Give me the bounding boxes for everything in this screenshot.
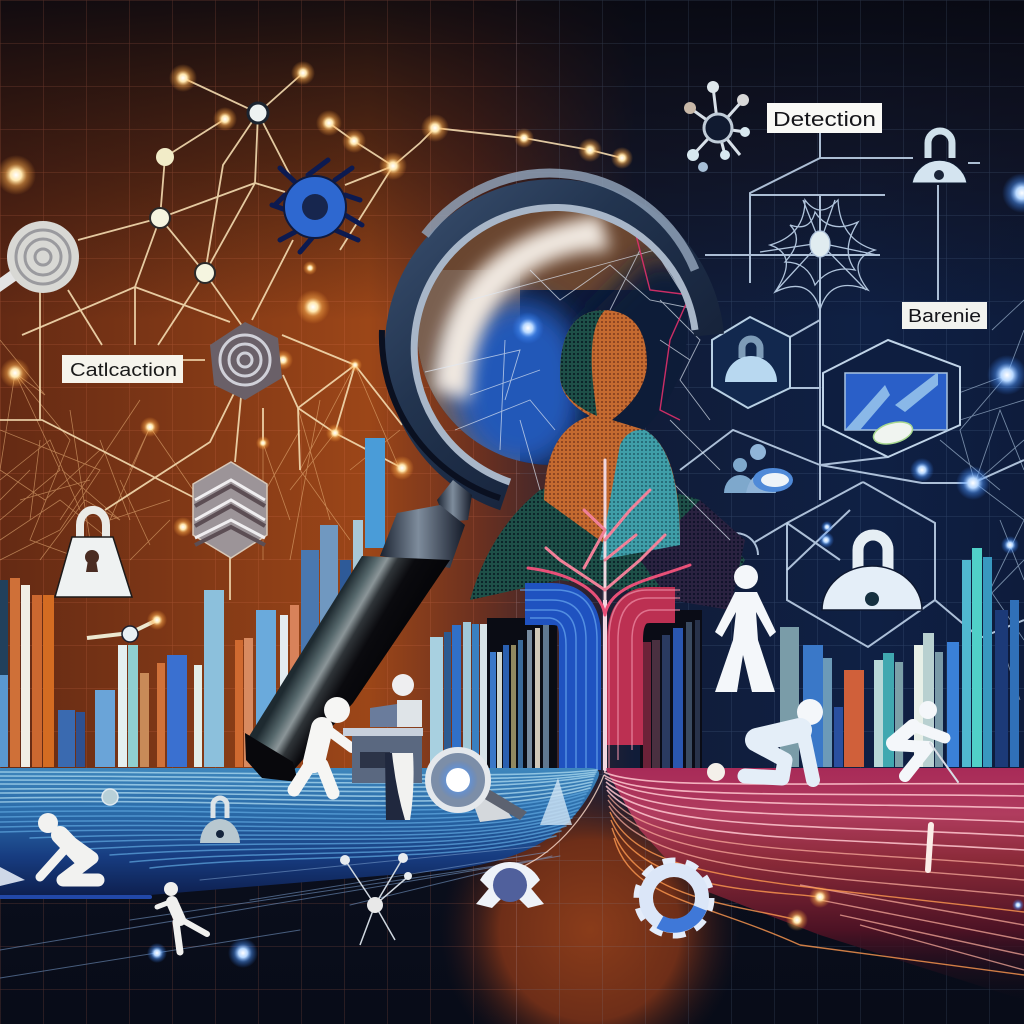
- icon: spider web: [760, 200, 877, 310]
- icon: spark lens: [428, 750, 527, 822]
- label: Barenie: Barenie: [908, 306, 981, 326]
- person: crouching right: [893, 701, 958, 782]
- person: kneeling: [745, 699, 823, 780]
- glint: [928, 825, 931, 870]
- fine mesh right: [940, 300, 1024, 700]
- red floor: [605, 768, 1024, 1000]
- person: kneeling left: [38, 813, 98, 880]
- sparkles right: [818, 173, 1024, 554]
- network: left constellation: [0, 73, 622, 600]
- network nodes left: [0, 61, 633, 537]
- label: Detection: Detection: [773, 109, 876, 131]
- board: [0, 867, 25, 886]
- icon: hexagon lock: [712, 317, 790, 408]
- floor streams: [0, 768, 1024, 1000]
- person: running: [157, 882, 207, 952]
- label: Catlcaction: [62, 355, 183, 383]
- data cloud behind person: [470, 470, 745, 610]
- curved data streams: [520, 590, 680, 770]
- icon: fingerprint disc: [210, 322, 282, 400]
- icon: molecule: [684, 81, 750, 172]
- handle cap: [245, 733, 298, 782]
- icon: gear: [639, 863, 709, 933]
- bottom sparkles: [147, 886, 1024, 968]
- circle marker: [707, 763, 725, 781]
- person: desk: [343, 674, 423, 783]
- people icons: [0, 565, 958, 952]
- silhouette person: [544, 310, 680, 560]
- icon: people group: [724, 444, 793, 493]
- icon: node on stick: [87, 610, 167, 642]
- icon: cog ring: [476, 862, 544, 908]
- pale node: [102, 789, 118, 805]
- ring: [382, 173, 709, 498]
- bar chart right: [780, 548, 1019, 767]
- bar chart left: [0, 438, 385, 767]
- magnifying glass: [245, 173, 730, 782]
- red floor lines: [520, 772, 1024, 975]
- lens: [418, 211, 686, 465]
- label: Catlcaction: Catlcaction: [70, 360, 177, 380]
- icon: wedge: [385, 753, 414, 820]
- bottom node: [340, 853, 412, 945]
- blue floor: [0, 768, 599, 895]
- tree: [528, 460, 690, 770]
- icon: virus: [272, 160, 362, 252]
- person: standing: [715, 565, 776, 692]
- icon: padlock top right: [912, 131, 967, 183]
- blue floor lines: [0, 770, 597, 978]
- label: Barenie: [902, 302, 987, 329]
- fine mesh left: [0, 340, 400, 560]
- bar chart centre and corridors: [430, 610, 702, 768]
- icon: large padlock: [822, 535, 922, 610]
- icon: padlock left: [55, 510, 132, 597]
- icon: chevron shield: [193, 462, 267, 558]
- icon: chart hexagon: [823, 340, 960, 457]
- right frame network: [680, 133, 1024, 647]
- icon: small padlock: [200, 798, 240, 843]
- label: Detection: [767, 103, 882, 133]
- icon: light cone: [540, 778, 572, 825]
- handle collar: [380, 480, 472, 568]
- person: walking centre: [294, 697, 352, 793]
- network over lens: [425, 235, 730, 540]
- sparkle in lens: [512, 312, 544, 344]
- handle: [248, 556, 450, 772]
- icon: spiral badge: [0, 221, 79, 293]
